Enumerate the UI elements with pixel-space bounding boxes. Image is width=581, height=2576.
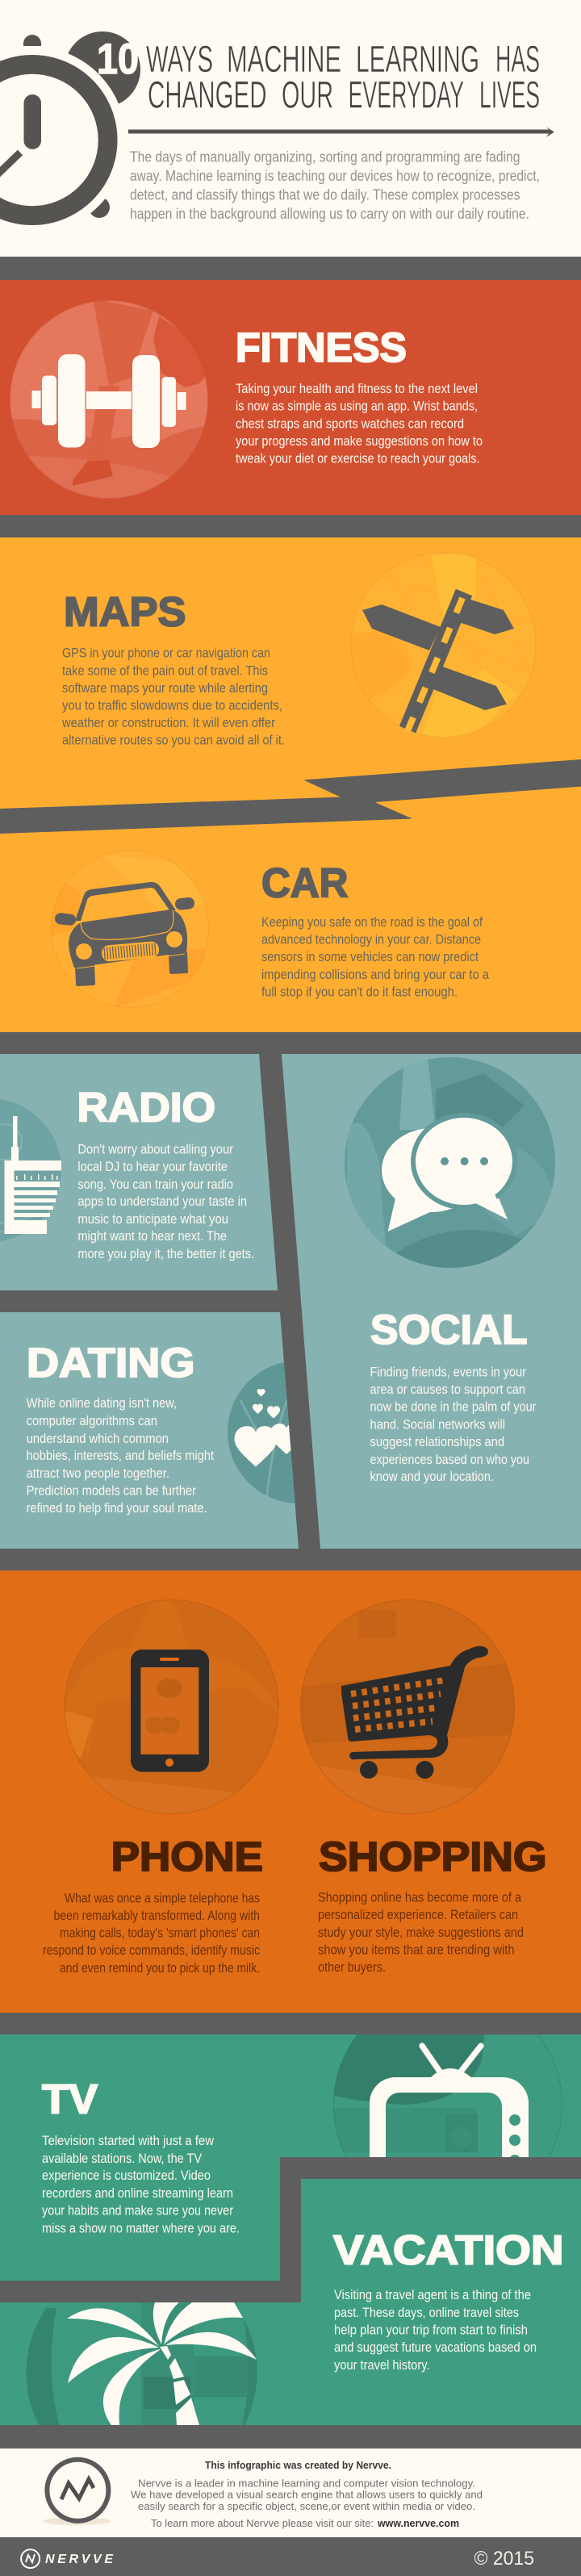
text: tv: experience is customized. Video	[42, 2168, 211, 2183]
panel: dating	[0, 1312, 299, 1549]
text: fitness: tweak your diet or exercise to reach your goals.	[236, 451, 479, 466]
text: tv: Television started with just a few	[42, 2133, 215, 2148]
text: dating	[27, 1395, 214, 1516]
intro text: happen in the background allowing us to carry on with our daily routine.	[130, 206, 529, 222]
text: dating: attract two people together.	[27, 1466, 169, 1481]
fitness background	[0, 280, 581, 515]
text: dating: understand which common	[27, 1431, 169, 1446]
number 10: 10	[97, 36, 139, 83]
text: dating: refined to help find your soul mate.	[27, 1500, 207, 1516]
heading: social: SOCIAL	[370, 1307, 528, 1353]
icon: dumbbell in photo circle	[10, 299, 208, 504]
icon: shopping cart in photo circle	[300, 1600, 516, 1816]
text: fitness: chest straps and sports watches can record	[236, 416, 464, 431]
text: phone: and even remind you to pick up the milk.	[60, 1960, 260, 1976]
radio background	[0, 1054, 278, 1290]
text: maps	[61, 646, 285, 748]
text: car	[261, 914, 489, 999]
text: vacation: Visiting a travel agent is a thing of the	[334, 2287, 531, 2302]
text: radio: music to anticipate what you	[77, 1211, 228, 1227]
panel: phone and shopping	[0, 1570, 581, 2013]
text: radio	[77, 1141, 254, 1261]
header background	[0, 0, 581, 257]
text: shopping: study your style, make suggestions and	[318, 1925, 524, 1940]
credit heading: This infographic was created by Nervve.	[205, 2460, 391, 2471]
text: radio: might want to hear next. The	[77, 1228, 227, 1244]
icon: radio tower in circle	[0, 1098, 65, 1242]
text: phone	[43, 1890, 260, 1976]
title: MACHINE	[227, 38, 341, 80]
text: tv: your habits and make sure you never	[42, 2203, 233, 2218]
icon: smartphone in photo circle	[65, 1600, 279, 1816]
panel: radio	[0, 1054, 278, 1290]
text: social: know and your location.	[370, 1469, 494, 1484]
text: car: full stop if you can't do it fast enough.	[261, 985, 458, 999]
title: OUR	[282, 73, 333, 116]
panel: maps and car	[0, 537, 581, 1032]
icon: signpost in map circle	[350, 552, 536, 738]
text: car: advanced technology in your car. Distance	[261, 932, 481, 947]
text: maps: take some of the pain out of travel. This	[62, 663, 268, 678]
text: shopping: show you items that are trending with	[318, 1942, 515, 1957]
text: shopping: personalized experience. Retailers can	[318, 1907, 518, 1922]
icon: car in photo circle	[50, 850, 211, 1009]
dating background	[0, 1312, 299, 1549]
text: phone: respond to voice commands, identify music	[43, 1942, 260, 1958]
text: social: area or causes to support can	[370, 1382, 525, 1397]
icon: television in circle	[333, 2034, 562, 2157]
text: shopping: other buyers.	[318, 1959, 386, 1975]
text: dating: computer algorithms can	[27, 1413, 157, 1428]
text: social: Finding friends, events in your	[370, 1365, 526, 1380]
brand name: NERVVE	[45, 2553, 114, 2566]
title: LEARNING	[356, 38, 479, 80]
vacation background	[0, 2179, 581, 2425]
text: vacation: your travel history.	[334, 2357, 429, 2373]
intro text: detect, and classify things that we do daily. These complex processes	[130, 187, 520, 203]
text: phone: making calls, today's 'smart phones' can	[60, 1926, 260, 1941]
icon: alarm clock	[0, 31, 140, 234]
title: CHANGED	[148, 73, 266, 116]
credit text: www.nervve.com	[377, 2517, 459, 2529]
heading: vacation: VACATION	[333, 2227, 564, 2273]
text: radio: local DJ to hear your favorite	[77, 1159, 228, 1174]
credit text: Nervve is a leader in machine learning and computer vision technology.	[138, 2478, 475, 2489]
icon: speech bubbles in photo circle	[345, 1057, 557, 1283]
text: phone: What was once a simple telephone has	[65, 1890, 260, 1906]
text: dating: Prediction models can be further	[27, 1483, 196, 1499]
text: social: hand. Social networks will	[370, 1417, 505, 1432]
text: phone: been remarkably transformed. Along with	[53, 1908, 260, 1923]
text: tv: miss a show no matter where you are.	[42, 2220, 240, 2235]
title: HAS	[495, 38, 540, 80]
text: car: Keeping you safe on the road is the goal of	[261, 914, 483, 930]
credits background	[0, 2448, 581, 2537]
text: vacation	[334, 2287, 537, 2373]
text: fitness: your progress and make suggestions on how to	[236, 433, 483, 449]
panel: tv	[0, 2034, 581, 2281]
text: maps: weather or construction. It will even offer	[61, 715, 275, 730]
text: social: suggest relationships and	[370, 1434, 504, 1449]
title	[146, 38, 540, 116]
text: fitness	[236, 381, 483, 466]
heading: maps: MAPS	[64, 589, 186, 635]
heading: shopping: SHOPPING	[319, 1834, 547, 1880]
heading: fitness: FITNESS	[236, 324, 407, 370]
text: maps: GPS in your phone or car navigation can	[62, 646, 270, 661]
text: radio: song. You can train your radio	[77, 1177, 233, 1192]
text: social: experiences based on who you	[370, 1452, 529, 1467]
panel: credits footer	[0, 2448, 581, 2537]
text: shopping: Shopping online has become more of a	[318, 1890, 521, 1905]
text: radio: Don't worry about calling your	[77, 1141, 233, 1157]
title: EVERYDAY	[349, 73, 464, 116]
heading: dating: DATING	[27, 1340, 195, 1386]
text: maps: software maps your route while alerting	[62, 680, 268, 696]
text: fitness: is now as simple as using an app. Wrist bands,	[236, 399, 478, 414]
orange background	[0, 1570, 581, 2013]
heading: radio: RADIO	[77, 1085, 215, 1131]
copyright: © 2015	[474, 2548, 534, 2570]
intro text: The days of manually organizing, sorting and programming are fading	[130, 148, 520, 165]
heading: tv: TV	[42, 2076, 98, 2122]
yellow background	[0, 537, 581, 1032]
credit text: We have developed a visual search engine that allows users to quickly and	[131, 2489, 483, 2501]
credit text: easily search for a specific object, scene,or event within media or video.	[138, 2500, 475, 2512]
panel: social	[282, 1054, 581, 1549]
social background	[282, 1054, 581, 1549]
logo: nervve	[44, 2460, 111, 2525]
heading: car: CAR	[261, 860, 349, 905]
bottom bar	[21, 2548, 534, 2570]
zigzag divider	[0, 759, 581, 834]
text: car: impending collisions and bring your car to a	[261, 967, 489, 982]
text: social	[370, 1365, 537, 1484]
text: radio: more you play it, the better it gets.	[77, 1246, 254, 1261]
text: tv: available stations. Now, the TV	[42, 2151, 203, 2166]
text: vacation: and suggest future vacations based on	[334, 2340, 537, 2355]
panel: header	[0, 0, 581, 257]
text: shopping	[318, 1890, 524, 1975]
panel: vacation	[0, 2179, 581, 2425]
credit text: To learn more about Nervve please visit our site:	[151, 2517, 374, 2529]
text: tv: recorders and online streaming learn	[42, 2185, 233, 2201]
arrow	[128, 128, 554, 137]
text: vacation: past. These days, online travel sites	[334, 2305, 519, 2320]
panel: fitness	[0, 280, 581, 515]
text: fitness: Taking your health and fitness to the next level	[236, 381, 478, 396]
icon: hearts in circle	[228, 1362, 295, 1503]
credit text	[131, 2478, 483, 2529]
text: maps: you to traffic slowdowns due to accidents,	[62, 697, 282, 713]
text: dating: hobbies, interests, and beliefs might	[27, 1448, 214, 1463]
title: WAYS	[146, 38, 213, 80]
text: maps: alternative routes so you can avoid all of it.	[62, 733, 285, 748]
text: car: sensors in some vehicles can now predict	[261, 949, 479, 964]
icon: palm tree in circle	[26, 2302, 257, 2425]
text: radio: apps to understand your taste in	[77, 1194, 247, 1209]
text: social: now be done in the palm of your	[370, 1399, 537, 1415]
intro text	[130, 148, 540, 222]
text: dating: While online dating isn't new,	[27, 1395, 177, 1411]
logo mark small	[21, 2549, 40, 2568]
text: tv	[42, 2133, 240, 2235]
heading: phone: PHONE	[111, 1834, 263, 1880]
text: vacation: help plan your trip from start to finish	[334, 2323, 528, 2337]
tv background	[0, 2034, 581, 2281]
